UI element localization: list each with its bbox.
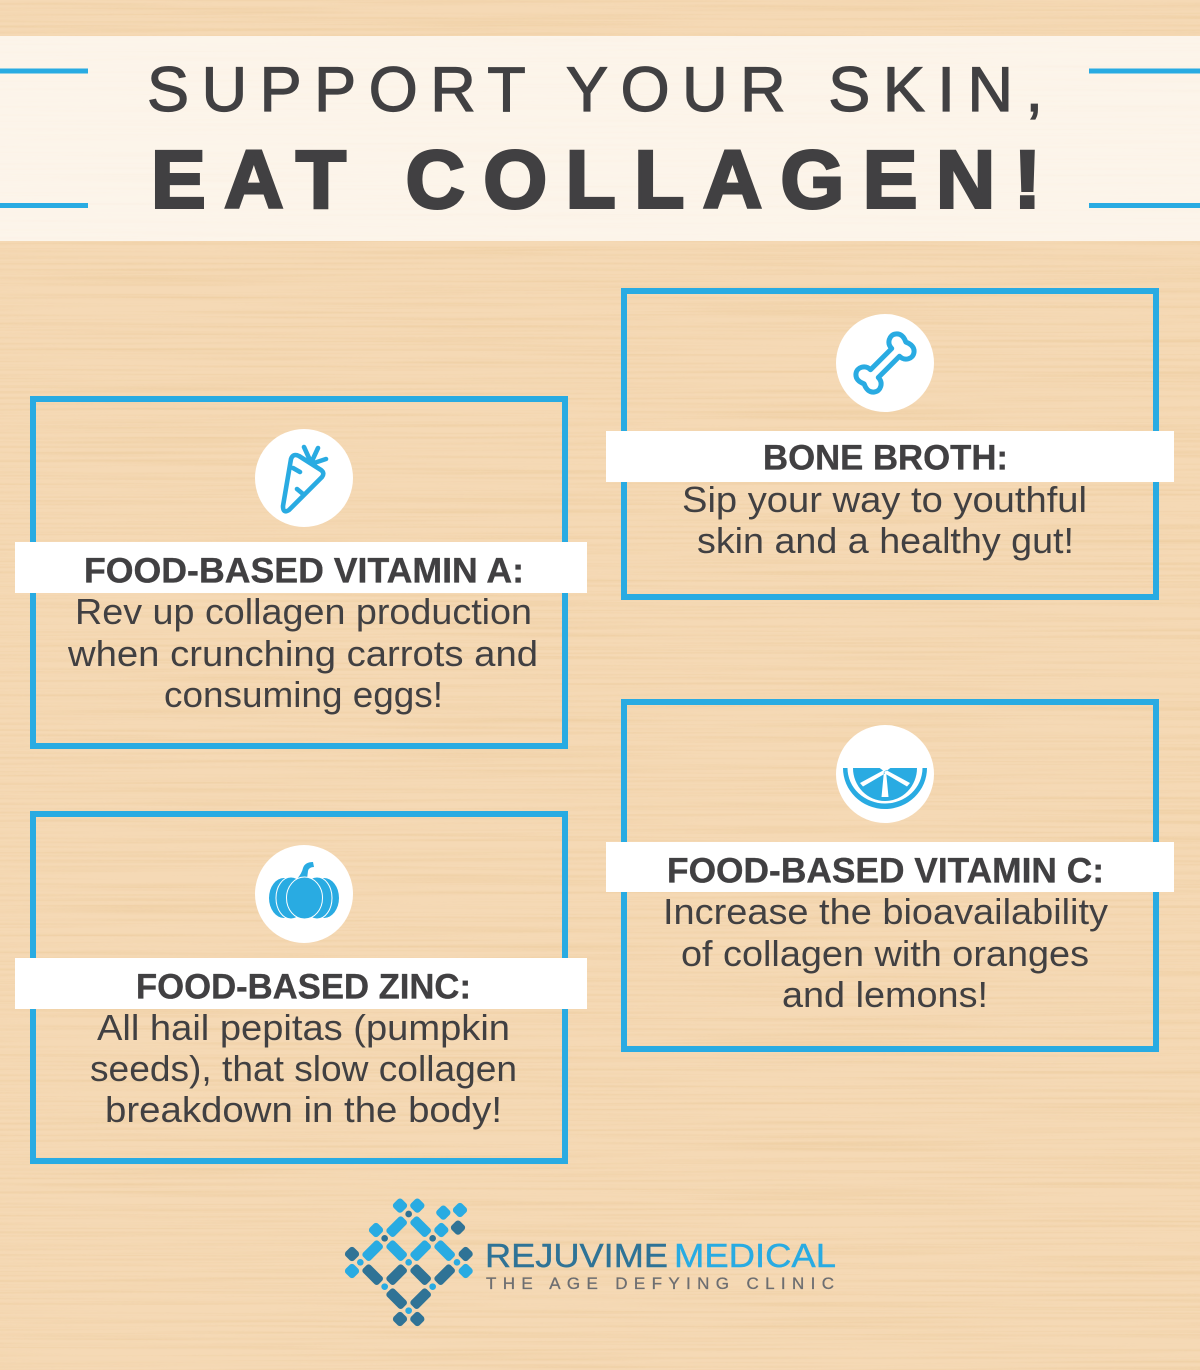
heading band: FOOD-BASED ZINC:	[136, 968, 471, 1006]
body text	[663, 891, 1108, 1015]
icon: bone	[836, 314, 934, 412]
icon: pumpkin	[255, 845, 353, 943]
logo wordmark accent: MEDICAL	[674, 1237, 836, 1274]
body text: breakdown in the body!	[105, 1089, 502, 1130]
heading band: FOOD-BASED VITAMIN A:	[84, 552, 524, 590]
heading band: FOOD-BASED VITAMIN C:	[667, 852, 1104, 890]
title line 2: EAT COLLAGEN!	[151, 134, 1041, 226]
body text: Rev up collagen production	[75, 591, 532, 632]
panel: food-based vitamin C	[606, 702, 1174, 1049]
body text: of collagen with oranges	[681, 933, 1089, 974]
heading band: BONE BROTH:	[763, 438, 1008, 478]
body text: seeds), that slow collagen	[90, 1048, 517, 1089]
logo: Rejuvime Medical	[344, 1197, 836, 1327]
panel: food-based vitamin A	[15, 399, 587, 746]
body text	[682, 479, 1087, 561]
logo wordmark: REJUVIME	[485, 1237, 668, 1274]
icon: citrus slice	[836, 725, 934, 823]
body text	[90, 1007, 517, 1130]
heading band	[15, 958, 587, 1009]
icon: carrot	[255, 429, 353, 527]
title banner	[0, 36, 1200, 241]
heading band	[606, 431, 1174, 482]
body text	[67, 591, 538, 715]
panel: bone broth	[606, 291, 1174, 597]
body text: Increase the bioavailability	[663, 891, 1108, 932]
logo tagline: THE AGE DEFYING CLINIC	[486, 1274, 834, 1293]
heading band	[606, 842, 1174, 892]
body text: Sip your way to youthful	[682, 479, 1087, 520]
body text: All hail pepitas (pumpkin	[97, 1007, 510, 1048]
heading band	[15, 542, 587, 593]
logo mark	[344, 1197, 474, 1327]
title line 1: SUPPORT YOUR SKIN,	[147, 55, 1043, 125]
body text: consuming eggs!	[164, 674, 443, 715]
body text: and lemons!	[782, 974, 988, 1015]
panel: food-based zinc	[15, 814, 587, 1161]
body text: when crunching carrots and	[67, 633, 538, 674]
body text: skin and a healthy gut!	[697, 520, 1074, 561]
